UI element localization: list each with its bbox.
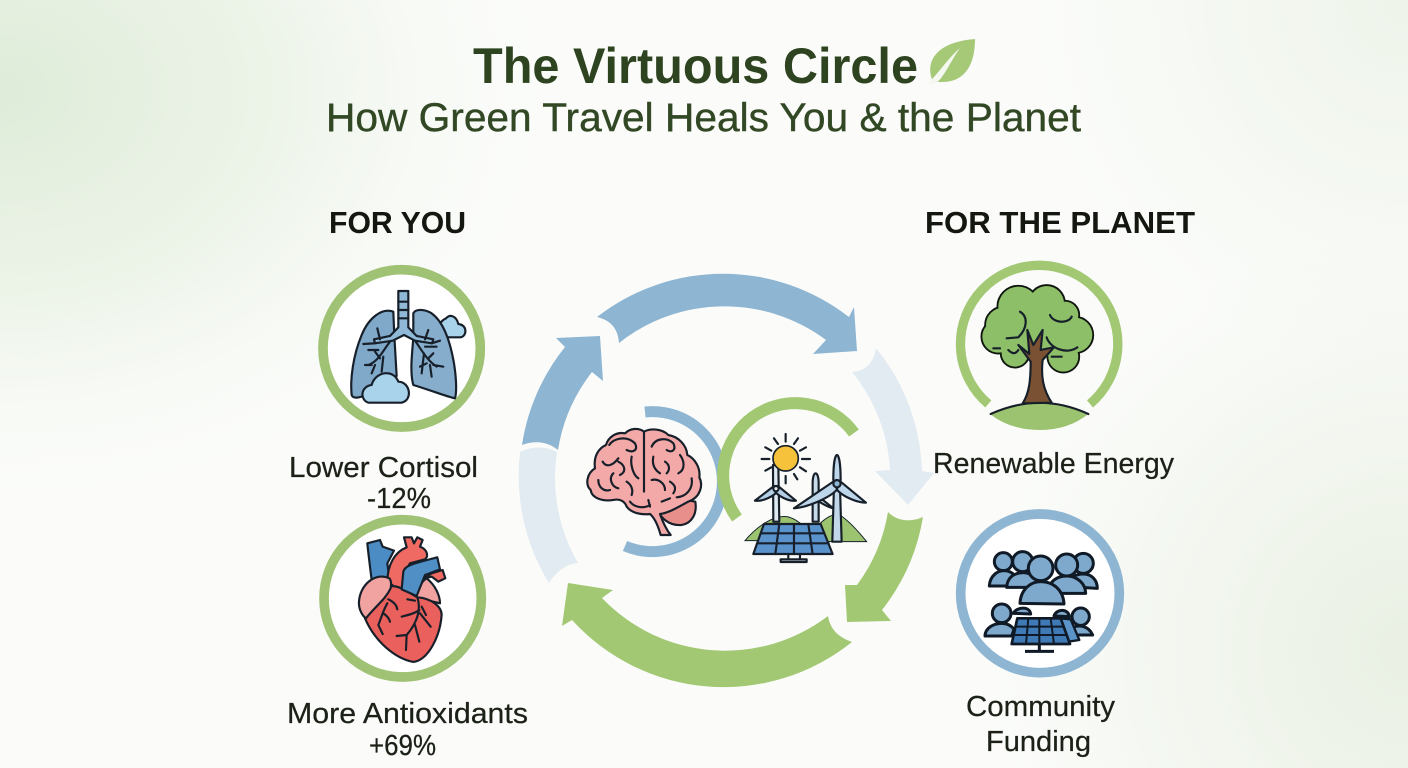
heading: for you: FOR YOU: [329, 205, 466, 240]
icon: community with solar panel in ring: [961, 514, 1119, 673]
icon: heart in ring: [324, 520, 481, 677]
label: community funding: [966, 691, 1115, 758]
label: lower cortisol: [289, 452, 478, 515]
arrow: top blue: [597, 274, 857, 354]
arrow: lower right green: [845, 512, 923, 622]
hill right: [817, 515, 867, 542]
turbine left: [773, 465, 779, 522]
turbines: [755, 455, 866, 542]
title: [326, 38, 1081, 140]
arrow: bottom green: [562, 583, 852, 687]
label: lower cortisol: -12%: [367, 483, 431, 515]
icon: leaf: [926, 39, 975, 84]
arc: brain ring: [625, 412, 722, 552]
icon: tree in ring: [960, 265, 1118, 430]
arrow: lower left pale: [519, 448, 578, 583]
label: more antioxidants: [287, 698, 528, 762]
label: community funding: Community: [966, 691, 1115, 723]
sun rays: [762, 434, 810, 483]
arrow: upper right pale: [852, 348, 934, 505]
sun: [773, 446, 798, 471]
label: lower cortisol: Lower Cortisol: [289, 452, 478, 484]
label: renewable energy: Renewable Energy: [933, 448, 1174, 480]
arc: energy ring: [723, 403, 854, 518]
icon: lungs in ring: [323, 270, 480, 427]
heading: for the planet: FOR THE PLANET: [925, 205, 1195, 240]
cycle diagram: [519, 274, 934, 687]
title: The Virtuous Circle: [473, 38, 918, 94]
label: community funding: Funding: [986, 726, 1091, 758]
hills: [745, 516, 823, 541]
icon: brain: [587, 429, 701, 535]
title: How Green Travel Heals You & the Planet: [326, 96, 1081, 140]
icon: sun, turbines and solar panel: [745, 434, 867, 562]
panel: [753, 524, 833, 562]
label: more antioxidants: More Antioxidants: [287, 698, 528, 730]
arrow: upper left blue: [522, 336, 603, 450]
label: more antioxidants: +69%: [369, 730, 436, 762]
